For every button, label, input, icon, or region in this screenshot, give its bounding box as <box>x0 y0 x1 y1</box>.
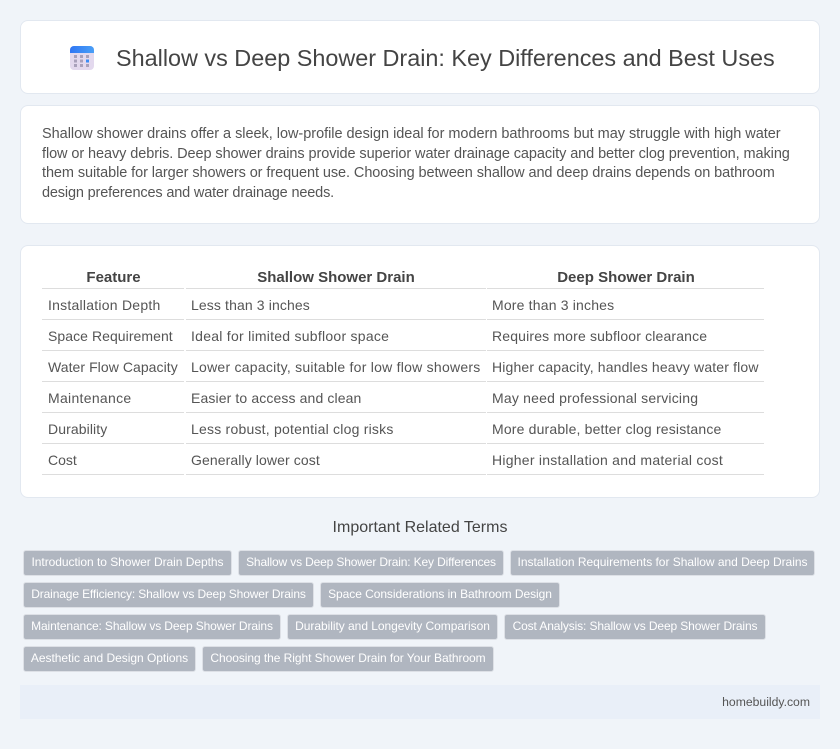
heading: related terms: Important Related Terms <box>333 519 507 536</box>
tag <box>320 582 560 608</box>
title: Shallow vs Deep Shower Drain: Key Differences and Best Uses <box>116 45 775 71</box>
row: durability: Durability <box>48 421 107 437</box>
panel: header <box>20 20 820 94</box>
tag <box>23 582 314 608</box>
row: maintenance <box>48 390 698 406</box>
row: cost <box>48 452 723 468</box>
tag <box>23 614 281 640</box>
tag <box>238 550 504 576</box>
tag: Installation Requirements for Shallow and Deep Drains <box>518 555 807 569</box>
row: space requirement: Ideal for limited subfloor space <box>191 328 389 344</box>
row: installation depth: Less than 3 inches <box>191 297 310 313</box>
tag: Cost Analysis: Shallow vs Deep Shower Drains <box>513 619 757 633</box>
intro text <box>42 126 790 200</box>
panel: comparison table <box>20 245 820 498</box>
row: maintenance: Easier to access and clean <box>191 390 361 406</box>
tag <box>202 646 494 672</box>
row: durability: Less robust, potential clog risks <box>191 421 394 437</box>
row: installation depth: Installation Depth <box>48 297 160 313</box>
tag: Durability and Longevity Comparison <box>295 619 490 633</box>
tag: Space Considerations in Bathroom Design <box>328 587 552 601</box>
row: durability: More durable, better clog resistance <box>492 421 721 437</box>
row: maintenance: Maintenance <box>48 390 131 406</box>
table header <box>86 269 695 286</box>
row: installation depth <box>48 297 614 313</box>
row: installation depth: More than 3 inches <box>492 297 614 313</box>
tag <box>23 646 196 672</box>
footer <box>20 685 820 719</box>
intro text: them suitable for larger showers or frequent use. Choosing between shallow and deep drains depends on bathroom <box>42 165 775 181</box>
intro text: flow or heavy debris. Deep shower drains provide superior water drainage capacity and better clog prevention, making <box>42 146 790 162</box>
row: space requirement: Requires more subfloor clearance <box>492 328 707 344</box>
tag <box>23 550 232 576</box>
table header: Shallow Shower Drain <box>257 269 415 286</box>
tag: Shallow vs Deep Shower Drain: Key Differences <box>246 555 496 569</box>
intro text: Shallow shower drains offer a sleek, low-profile design ideal for modern bathrooms but may struggle with high water <box>42 126 781 142</box>
tag: Choosing the Right Shower Drain for Your Bathroom <box>210 651 486 665</box>
icon: calendar <box>70 46 94 70</box>
table header: Feature <box>86 269 141 286</box>
footer source: homebuildy.com <box>722 695 810 709</box>
row: cost: Cost <box>48 452 77 468</box>
tag: Introduction to Shower Drain Depths <box>31 555 224 569</box>
row: water flow capacity: Lower capacity, suitable for low flow showers <box>191 359 481 375</box>
row: space requirement: Space Requirement <box>48 328 173 344</box>
tag: Drainage Efficiency: Shallow vs Deep Shower Drains <box>31 587 306 601</box>
row: maintenance: May need professional servicing <box>492 390 698 406</box>
row: water flow capacity: Water Flow Capacity <box>48 359 178 375</box>
tag: Aesthetic and Design Options <box>31 651 188 665</box>
row: space requirement <box>48 328 707 344</box>
tag <box>504 614 766 640</box>
tag: Maintenance: Shallow vs Deep Shower Drains <box>31 619 273 633</box>
tag <box>510 550 815 576</box>
row: cost: Higher installation and material cost <box>492 452 723 468</box>
table header: Deep Shower Drain <box>557 269 695 286</box>
row: cost: Generally lower cost <box>191 452 320 468</box>
intro text: design preferences and water drainage needs. <box>42 184 334 200</box>
tag <box>287 614 498 640</box>
related term tags <box>23 550 815 672</box>
row: water flow capacity: Higher capacity, handles heavy water flow <box>492 359 759 375</box>
row: durability <box>48 421 721 437</box>
row: water flow capacity <box>48 359 759 375</box>
panel: intro <box>20 105 820 224</box>
